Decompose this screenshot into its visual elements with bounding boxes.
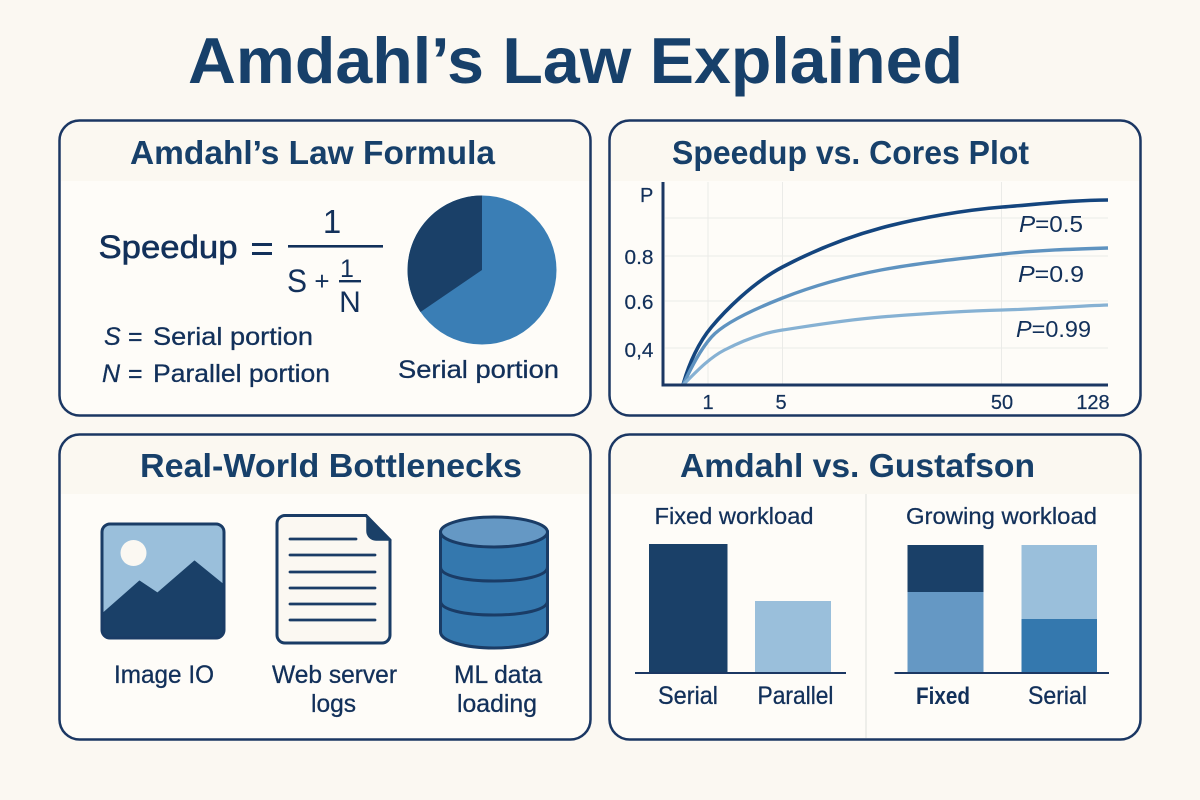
formula — [98, 203, 383, 319]
line chart: P=0.9 — [1018, 261, 1084, 287]
label: Web server logs: logs — [311, 690, 356, 718]
heading: comparison panel: Amdahl vs. Gustafson — [680, 447, 1035, 484]
legend: variable definitions: N — [102, 360, 121, 388]
line chart: 1 — [702, 392, 714, 414]
line chart: 50 — [991, 392, 1013, 414]
chart: fixed workload: Parallel — [758, 682, 834, 710]
label: ML data loading: loading — [457, 690, 537, 718]
line chart: P=0.99 — [1016, 316, 1091, 342]
heading: bottlenecks panel: Real-World Bottlenecks — [140, 447, 522, 484]
legend: variable definitions: S — [104, 323, 121, 351]
chart: growing workload: Growing workload — [906, 503, 1097, 529]
formula: 1 — [340, 255, 354, 283]
label: Web server logs — [272, 661, 397, 718]
line chart: 0,4 — [624, 340, 654, 362]
legend: variable definitions: Serial portion — [153, 323, 313, 351]
panel: Speedup vs. Cores Plot — [610, 120, 1140, 416]
chart: growing workload: Fixed — [916, 683, 970, 710]
line chart — [624, 182, 1110, 414]
line chart: P — [640, 185, 653, 207]
formula: 1 — [323, 203, 341, 240]
legend: variable definitions — [102, 323, 330, 388]
panel: Amdahl's Law Formula — [60, 120, 590, 416]
chart: growing workload — [894, 503, 1109, 710]
line chart: 0.6 — [624, 292, 654, 314]
formula: S — [287, 263, 307, 299]
heading: formula panel: Amdahl’s Law Formula — [130, 134, 496, 171]
panel: Real-World Bottlenecks — [60, 434, 590, 740]
label: ML data loading — [454, 661, 542, 718]
line chart: 128 — [1076, 392, 1110, 414]
formula: N — [339, 286, 361, 319]
legend: variable definitions: = — [128, 360, 143, 388]
pie label: Serial portion — [398, 356, 559, 384]
heading: plot panel: Speedup vs. Cores Plot — [672, 134, 1029, 171]
icon: image — [102, 524, 224, 638]
title: Amdahl’s Law Explained — [188, 24, 963, 97]
line chart: 0.8 — [624, 247, 654, 269]
panel: Amdahl vs. Gustafson — [610, 434, 1140, 740]
label: ML data loading: ML data — [454, 661, 542, 689]
line chart: P=0.5 — [1019, 211, 1083, 237]
chart: fixed workload: Fixed workload — [654, 503, 814, 529]
formula: Speedup — [98, 229, 238, 265]
icon: database — [440, 517, 548, 648]
chart: fixed workload — [635, 503, 846, 710]
line chart: 5 — [775, 392, 787, 414]
legend: variable definitions: = — [128, 323, 143, 351]
label: Web server logs: Web server — [272, 661, 397, 689]
label: Image IO: Image IO — [114, 661, 214, 689]
pie chart — [408, 196, 556, 344]
icon: document — [277, 516, 390, 643]
legend: variable definitions: Parallel portion — [153, 360, 330, 388]
formula: + — [314, 266, 330, 296]
chart: fixed workload: Serial — [658, 682, 718, 710]
chart: growing workload: Serial — [1028, 682, 1087, 710]
